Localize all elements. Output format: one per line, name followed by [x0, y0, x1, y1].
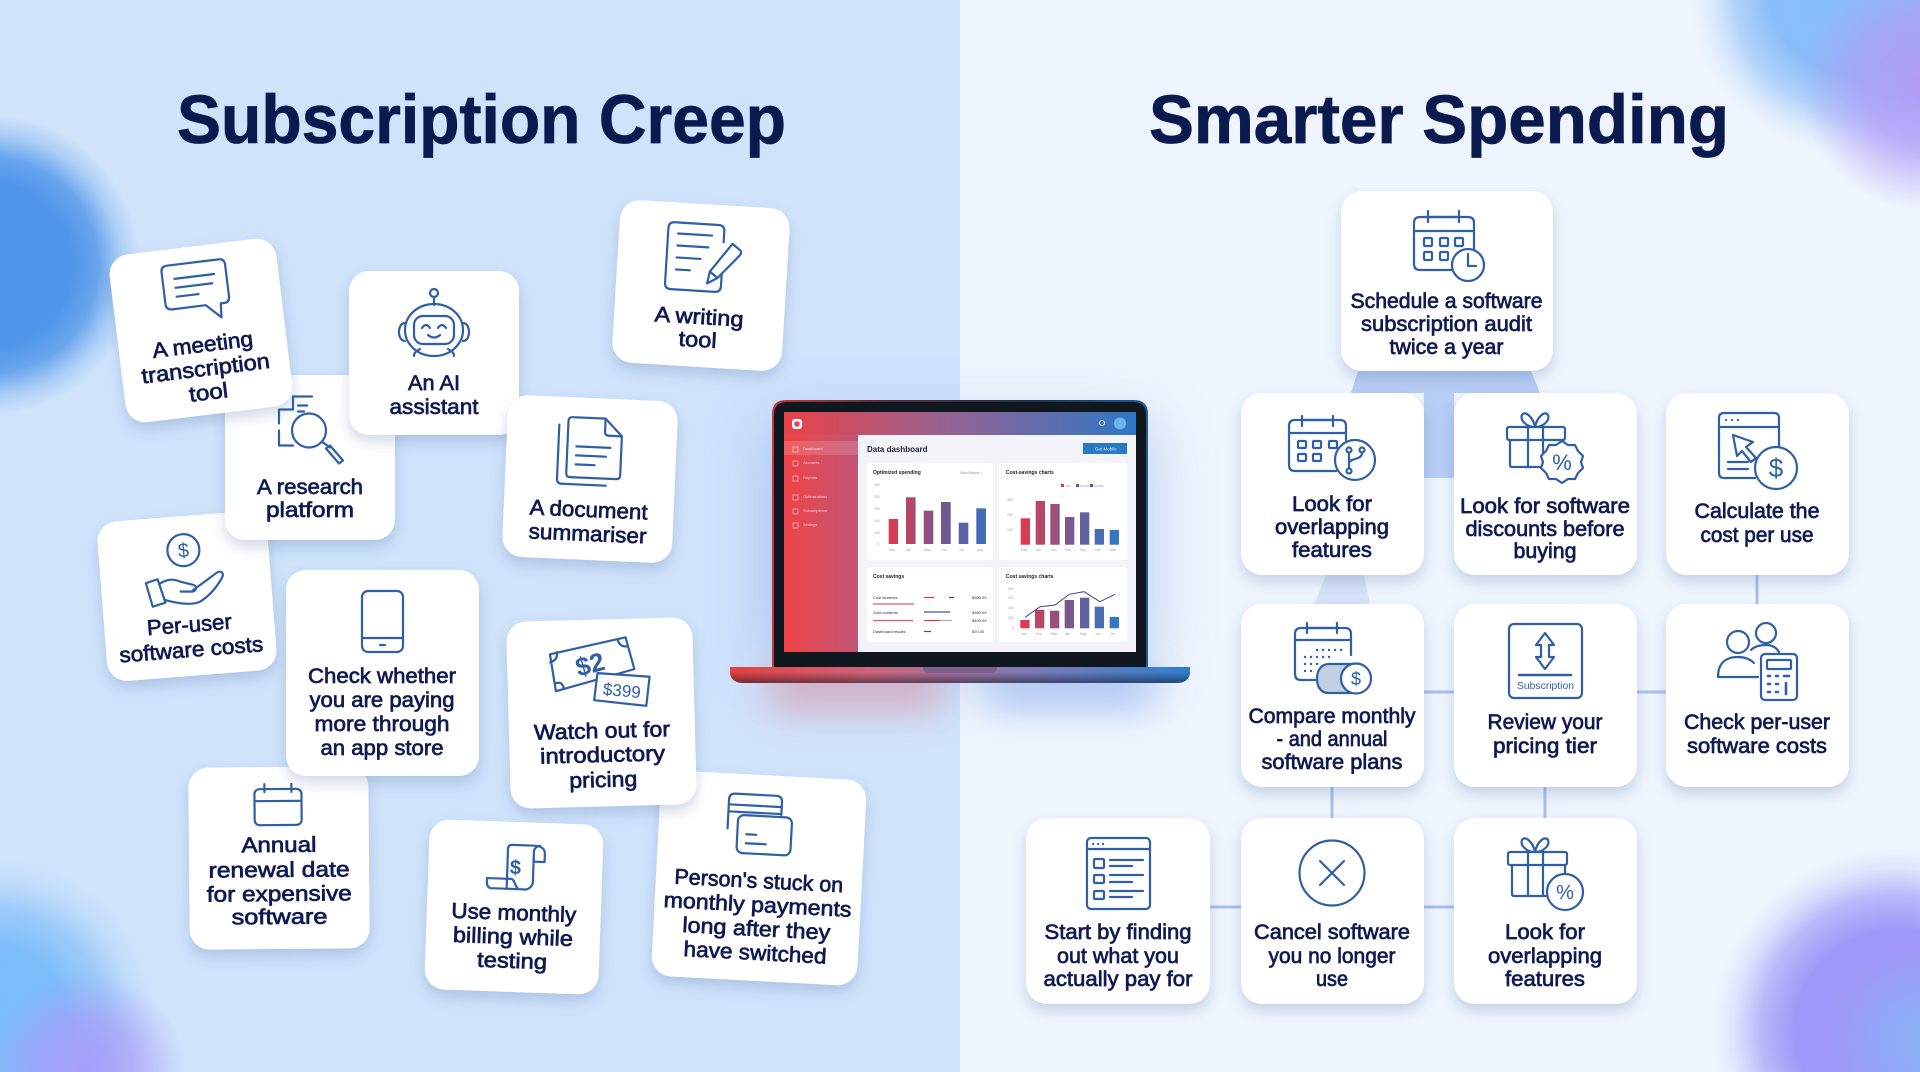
chart: cost-savings charts: Dec [1095, 548, 1101, 552]
table: cost savings [867, 567, 993, 642]
label: overlapping [1488, 944, 1602, 968]
card: A meeting transcription tool [107, 236, 295, 425]
chart: cost savings combo: Cost savings charts [1006, 574, 1054, 580]
chart: optimized spending: 0 [877, 542, 879, 546]
label: Look for [1292, 492, 1372, 516]
label [390, 371, 479, 419]
chart: optimized spending: Apr [906, 548, 912, 552]
chart: cost savings combo: Jul [1110, 632, 1115, 636]
chart: cost savings combo: 300 [1008, 587, 1014, 591]
chart: optimized spending: 300 [874, 483, 880, 487]
icon: subscription tier box: Subscription [1517, 680, 1574, 692]
label [652, 302, 744, 355]
label: Compare monthly [1248, 704, 1416, 728]
label [206, 832, 352, 930]
label [1248, 704, 1416, 774]
label: Person's stuck on [674, 865, 844, 897]
label: tool [678, 327, 717, 353]
label: features [1505, 967, 1585, 991]
label: Use monthly [451, 899, 577, 927]
label [1684, 710, 1830, 758]
label: renewal date [209, 857, 350, 883]
icon: magnifier over document [279, 396, 343, 464]
card: A research platform [225, 375, 395, 540]
label: have switched [683, 937, 827, 969]
title: Subscription Creep: Subscription Creep [177, 81, 786, 158]
chart: optimized spending [867, 463, 993, 560]
chart: cost-savings charts: Mar [1021, 548, 1028, 552]
table: cost savings: Cost students [873, 595, 897, 600]
laptop base [730, 667, 1190, 683]
label: - and annual [1276, 727, 1388, 751]
icon: documents [557, 417, 623, 486]
label [661, 864, 853, 970]
card: An AI assistant [349, 271, 519, 435]
icon: credit cards [726, 793, 793, 856]
screen sidebar: Dashboard [803, 446, 823, 451]
label [308, 664, 456, 760]
screen content area [858, 435, 1136, 652]
chart: cost-savings charts: Cost-savings charts [1006, 470, 1054, 476]
chart: cost-savings charts: 300 [1007, 498, 1013, 502]
chart: cost savings combo: 200 [1008, 596, 1014, 600]
chart: cost-savings charts: 200 [1007, 513, 1013, 517]
title: Smarter Spending: Smarter Spending [1149, 81, 1729, 158]
label: you no longer [1268, 944, 1396, 968]
chart: cost savings combo: Jan [1021, 632, 1027, 636]
table: cost savings: $400.00 [972, 618, 987, 623]
label: use [1316, 967, 1348, 991]
card: Cancel software you no longer use [1241, 818, 1424, 1004]
label: tool [188, 378, 229, 407]
icon: price tags [550, 637, 650, 708]
label: you are paying [310, 688, 454, 712]
label [1275, 492, 1389, 562]
label: Calculate the [1694, 499, 1820, 523]
screen sidebar: Accounts [803, 460, 819, 465]
label: overlapping [1275, 515, 1389, 539]
screen header [784, 412, 1136, 436]
icon: price tags: $2 [572, 646, 608, 683]
icon: gift with percent: % [1556, 882, 1574, 904]
chart: optimized spending: 200 [874, 507, 880, 511]
icon: gift with discount badge: % [1552, 450, 1572, 475]
chart: cost-savings charts: Apr [1036, 548, 1042, 552]
label: Cancel software [1254, 920, 1410, 944]
card: A writing tool [611, 199, 791, 372]
label [1350, 289, 1542, 359]
chart: optimized spending: Jul [959, 548, 964, 552]
laptop notch [923, 667, 997, 673]
label: features [1292, 538, 1372, 562]
chart: optimized spending: 100 [874, 531, 880, 535]
icon: gift with discount badge [1507, 413, 1583, 483]
label: twice a year [1390, 335, 1504, 359]
screen sidebar: Optimizations [803, 494, 827, 499]
card: Person's stuck on monthly payments [651, 770, 867, 986]
label [1694, 499, 1820, 547]
label: buying [1514, 539, 1576, 563]
icon: hand holding coin: $ [177, 540, 190, 563]
icon: calendar with branch [1289, 416, 1375, 480]
laptop with data dashboard [730, 400, 1190, 705]
label: billing while [453, 923, 573, 951]
chart: optimized spending: May [924, 548, 931, 552]
chart: optimized spending: 150 [874, 519, 880, 523]
label [1254, 920, 1410, 991]
icon: calendar with clock [1414, 211, 1484, 281]
icon: calendar [254, 784, 302, 825]
label: An AI [408, 371, 460, 395]
screen sidebar: Reports [803, 475, 817, 480]
label [1488, 710, 1602, 758]
label: Annual [241, 833, 316, 857]
chart: optimized spending: Optimized spending [873, 470, 921, 476]
card: A document summariser [502, 394, 678, 564]
chart: cost-savings charts: 100 [1007, 528, 1013, 532]
dashboard button [1083, 443, 1127, 454]
label: discounts before [1466, 517, 1624, 541]
chart: cost savings combo: 100 [1008, 616, 1014, 620]
label [534, 717, 672, 794]
label: for expensive [207, 881, 352, 907]
card: Review your pricing tier [1454, 604, 1637, 787]
screen sidebar: Settings [803, 522, 817, 527]
icon: price tags: $399 [602, 680, 642, 702]
card: Use monthly billing while testing [424, 819, 604, 995]
table: cost savings: Dashboard results [873, 629, 905, 634]
connector: top trapezoid [1351, 371, 1540, 478]
screen bell and avatar [1100, 418, 1126, 430]
chart: cost-savings charts [999, 463, 1127, 560]
laptop lid [772, 400, 1148, 667]
label: testing [477, 948, 548, 974]
label: Per-user [146, 610, 233, 640]
chart: cost-savings charts: Feb [1065, 548, 1071, 552]
label: Look for software [1460, 494, 1630, 518]
dashboard heading: Data dashboard [867, 445, 928, 454]
label: pricing tier [1493, 734, 1597, 758]
background: left panel [0, 0, 960, 1072]
label: an app store [320, 736, 444, 760]
icon: hand holding coin [142, 531, 225, 607]
label: transcription [140, 349, 271, 388]
label: A meeting [151, 327, 254, 363]
card: Look for overlapping features (row 4) [1454, 818, 1637, 1004]
label: Look for [1505, 920, 1585, 944]
label: Start by finding [1044, 920, 1192, 944]
icon: browser cursor and coin [1719, 413, 1797, 489]
card: Calculate the cost per use [1666, 393, 1849, 575]
label [1488, 920, 1602, 991]
label: A document [529, 495, 648, 525]
chart: cost savings combo: Mar [1051, 632, 1058, 636]
card: Start by finding out what you actually pay for [1026, 818, 1210, 1004]
table: cost savings: $70.00 [972, 629, 985, 634]
label: more through [314, 712, 450, 736]
table: cost savings: $360.00 [972, 610, 987, 615]
card: Per-user software costs [96, 510, 278, 682]
chart: cost savings combo [999, 567, 1127, 642]
connector lines [1210, 575, 1757, 907]
chart: cost-savings charts: Actual [1080, 484, 1090, 488]
chart: cost-savings charts: Sep [1080, 548, 1086, 552]
label: introductory [540, 741, 666, 769]
card: Annual renewal date for expensive software [188, 766, 370, 950]
label: monthly payments [663, 888, 852, 922]
label: software [231, 905, 328, 929]
card: Watch out for introductory pricing [506, 617, 697, 809]
table: cost savings: Cost savings [873, 574, 904, 580]
label: Schedule a software [1350, 289, 1542, 313]
icon: calendar with coin [1295, 623, 1371, 694]
chart: optimized spending: Mar [889, 548, 896, 552]
background: right panel [960, 0, 1920, 1072]
card: Check whether you are paying more through an app store [286, 570, 479, 776]
label: Check per-user [1684, 710, 1830, 734]
label: out what you [1057, 944, 1179, 968]
card: Look for software discounts before buying [1454, 393, 1637, 575]
label [257, 475, 363, 522]
screen sidebar: Subscriptions [803, 508, 827, 513]
chart: cost-savings charts: Jun [1051, 548, 1057, 552]
label [1460, 494, 1630, 563]
laptop bezel [774, 402, 1146, 667]
chart: optimized spending: Aug [977, 548, 983, 552]
label: software costs [1687, 734, 1827, 758]
icon: speech bubble [161, 259, 231, 324]
icon: list window [1087, 838, 1150, 909]
icon: browser cursor and coin: $ [1769, 453, 1784, 483]
connector: lower trapezoid [1314, 575, 1370, 605]
chart: cost savings combo: Jun [1095, 632, 1101, 636]
label: summariser [528, 519, 647, 549]
icon: calendar with coin: $ [1351, 669, 1361, 689]
label: A research [257, 475, 363, 499]
label: actually pay for [1044, 967, 1192, 991]
label: software costs [119, 632, 264, 667]
icon: people with calculator [1718, 623, 1797, 700]
chart: cost-savings charts: Mar [1110, 548, 1117, 552]
icon: smartphone [362, 591, 403, 652]
chart: cost savings combo: Apr [1065, 632, 1071, 636]
icon: robot [399, 289, 469, 356]
label [449, 899, 577, 975]
icon: cancel circle [1300, 840, 1364, 906]
label: Review your [1488, 710, 1602, 734]
label: subscription audit [1361, 312, 1532, 336]
card: Check per-user software costs [1666, 604, 1849, 787]
chart: optimized spending: View Report > [960, 471, 982, 475]
chart: optimized spending: Jun [941, 548, 947, 552]
icon: receipt scroll: $ [509, 857, 521, 879]
laptop glow shadow [765, 420, 1155, 705]
label [117, 607, 264, 667]
icon: gift with percent [1508, 838, 1583, 910]
icon: subscription tier box [1509, 624, 1582, 698]
screen sidebar [784, 419, 858, 652]
label [1044, 920, 1192, 991]
card: Schedule a software subscription audit [1341, 191, 1553, 371]
label: pricing [569, 767, 638, 793]
label: assistant [390, 395, 479, 419]
chart: cost savings combo: Feb [1036, 632, 1042, 636]
label [528, 495, 648, 549]
icon: receipt scroll [487, 844, 545, 890]
chart: cost-savings charts: Jan [1065, 484, 1071, 488]
label: cost per use [1700, 523, 1814, 547]
label: Watch out for [534, 717, 670, 745]
icon: document with pencil [665, 222, 743, 293]
chart: cost savings combo: 0 [1012, 626, 1014, 630]
chart: optimized spending: 250 [874, 495, 880, 499]
label: long after they [682, 913, 831, 945]
label: Check whether [308, 664, 456, 688]
label: platform [266, 498, 354, 522]
chart: cost savings combo: 150 [1008, 606, 1014, 610]
table: cost savings: $300.00 [972, 595, 987, 600]
chart: cost-savings charts: Actual [1094, 484, 1104, 488]
chart: cost savings combo: May [1080, 632, 1087, 636]
dashboard button: Get Mobile [1095, 446, 1117, 452]
card: Compare monthly and annual software plans [1241, 604, 1424, 787]
laptop base underside [730, 672, 1190, 683]
label: software plans [1262, 750, 1402, 774]
card: Look for overlapping features (row 2) [1241, 393, 1424, 575]
table: cost savings: Gold contents [873, 610, 898, 615]
label: A writing [654, 302, 744, 332]
label [137, 325, 274, 412]
